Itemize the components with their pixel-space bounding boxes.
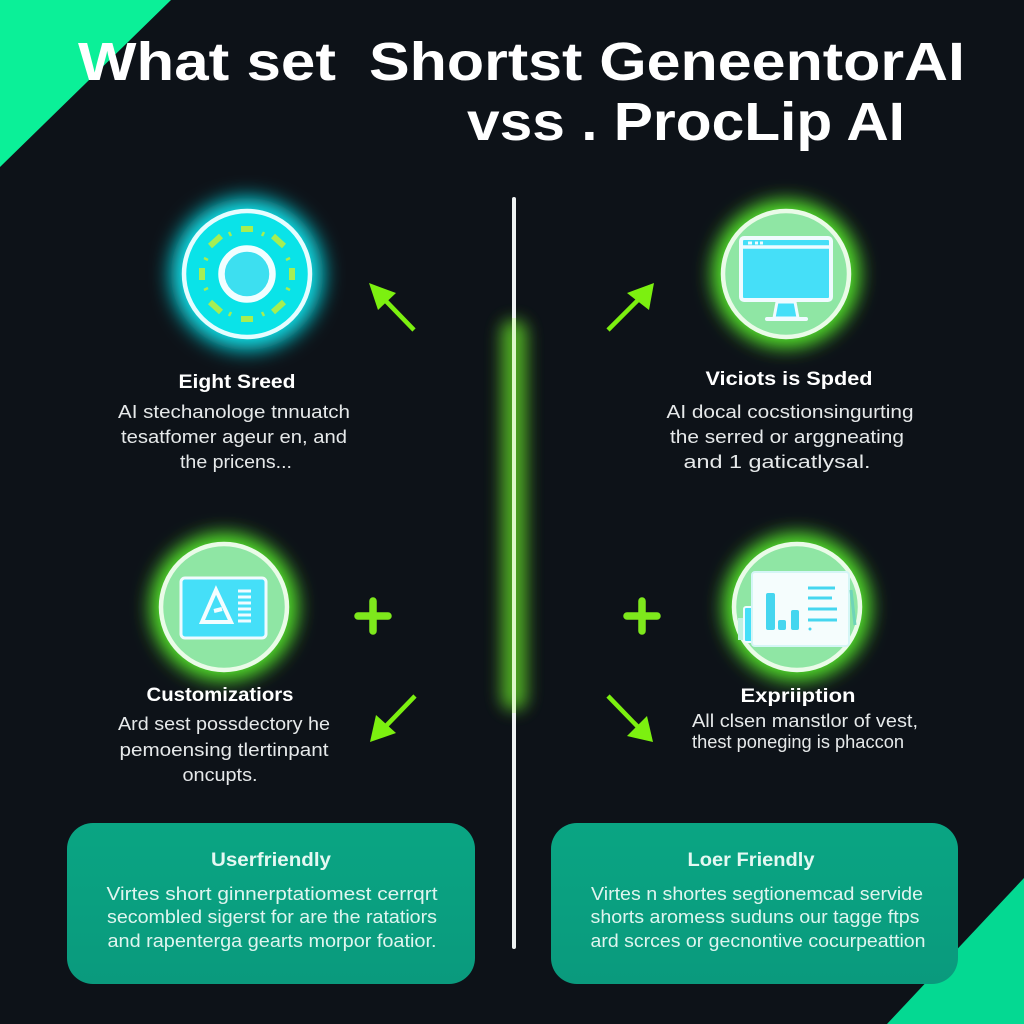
body text: left panel: Virtes short ginnerptatiomest cerrqrt <box>106 884 438 904</box>
text block: Viciots is Spded: AI docal cocstionsingurting <box>666 402 914 422</box>
body text: right panel: shorts aromess suduns our tagge ftps <box>590 907 920 927</box>
icon: AI card <box>150 533 298 681</box>
arrow: bottom left <box>370 696 415 742</box>
panel: User friendly <box>67 823 475 984</box>
body text: left panel: secombled sigerst for are the ratatiors <box>107 907 437 927</box>
body text: right panel <box>590 884 926 951</box>
corner triangle: bottom right <box>887 878 1024 1024</box>
text block: Viciots is Spded <box>666 369 914 472</box>
text block: Customizatiors: pemoensing tlertinpant <box>120 740 328 760</box>
center divider with green glow <box>501 197 527 949</box>
text block: Eight Sreed: the pricens... <box>180 452 292 472</box>
panel: Loer Friendly <box>551 823 958 984</box>
body text: right panel: ard scrces or gecnontive cocurpeattion <box>590 931 926 951</box>
icon: plus left <box>358 601 388 631</box>
body text: right panel: Virtes n shortes segtionemcad servide <box>591 884 923 904</box>
icon: dashboard <box>723 533 871 681</box>
title: Shortst GeneentorAI <box>369 32 965 92</box>
text block: Viciots is Spded: and 1 gaticatlysal. <box>684 452 870 472</box>
icon: plus right <box>627 601 657 631</box>
text block: Eight Sreed: AI stechanologe tnnuatch <box>118 402 350 422</box>
title <box>78 32 965 152</box>
title: What set <box>78 32 336 92</box>
heading: Loer Friendly: Loer Friendly <box>688 850 815 871</box>
text block: Expriiption: thest poneging is phaccon <box>692 732 904 752</box>
arrow: top right <box>608 283 654 330</box>
text block: Customizatiors: Ard sest possdectory he <box>118 714 330 734</box>
text block: Eight Sreed: Eight Sreed <box>178 372 296 393</box>
arrow: bottom right <box>608 696 653 742</box>
text block: Customizatiors: oncupts. <box>182 765 258 785</box>
text block: Expriiption: Expriiption <box>740 686 856 707</box>
icon: monitor <box>712 200 860 348</box>
text block: Viciots is Spded: Viciots is Spded <box>706 369 872 390</box>
icon: speed dial <box>171 198 323 350</box>
text block: Expriiption <box>692 686 918 752</box>
text block: Customizatiors <box>118 685 330 785</box>
text block: Eight Sreed <box>118 372 350 472</box>
text block: Expriiption: All clsen manstlor of vest, <box>692 711 918 731</box>
text block: Eight Sreed: tesatfomer ageur en, and <box>121 427 347 447</box>
body text: left panel: and rapenterga gearts morpor foatior. <box>108 931 436 951</box>
corner triangle: top left <box>0 0 171 167</box>
text block: Customizatiors: Customizatiors <box>146 685 294 706</box>
body text: left panel <box>106 884 438 951</box>
text block: Viciots is Spded: the serred or arggneating <box>670 427 904 447</box>
arrow: top left <box>369 283 414 330</box>
title: vss . ProcLip AI <box>467 92 905 152</box>
heading: Userfriendly: Userfriendly <box>211 850 331 871</box>
